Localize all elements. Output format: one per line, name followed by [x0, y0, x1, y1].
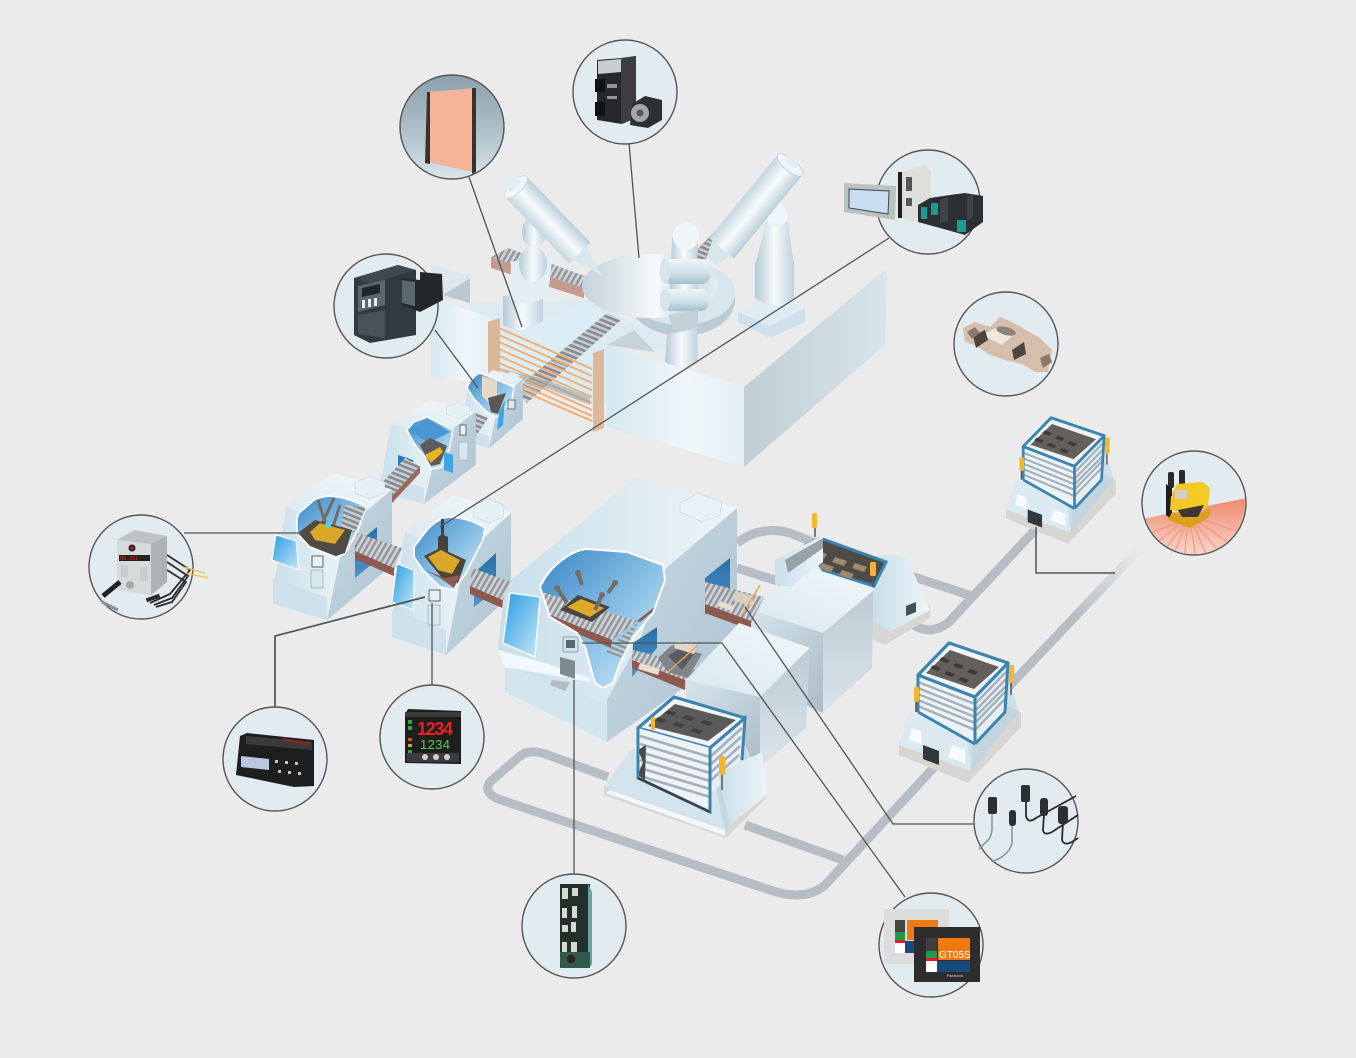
belt between machines 1 and 2	[456, 408, 488, 447]
belt between machines 2 and 3	[379, 458, 420, 503]
factory automation illustration	[88, 39, 1247, 998]
machine 3	[272, 473, 392, 620]
cell floor	[470, 300, 690, 405]
callout: laser marker controller: 88. 251	[120, 556, 138, 562]
workpiece	[424, 548, 466, 583]
rear panel	[884, 909, 949, 964]
callout: controller and display	[844, 150, 983, 254]
left robot	[498, 169, 613, 330]
machine 4	[392, 495, 511, 655]
middle AGV	[899, 643, 1021, 783]
conveyor exit lower	[632, 640, 702, 690]
belt between machines 4 and 5	[470, 568, 511, 610]
display	[429, 590, 440, 601]
keypad	[560, 657, 575, 679]
callout: servo motor and driver	[573, 40, 677, 144]
back AGV	[775, 513, 930, 645]
display	[312, 556, 323, 567]
front panel: GT05S	[939, 950, 971, 961]
workpiece	[298, 520, 352, 556]
sensor	[438, 519, 448, 553]
cutaway window	[540, 549, 665, 688]
callout: temperature controller: 1234	[420, 737, 450, 752]
belt between machines 3 and 4	[355, 533, 402, 576]
rear robot	[738, 203, 805, 338]
roof block	[680, 493, 722, 522]
laser beams	[318, 498, 340, 530]
right wall side	[744, 268, 887, 467]
callout: laser marker controller	[89, 515, 208, 619]
callout: safety laser scanner	[1142, 451, 1247, 558]
callout: light curtain	[400, 75, 504, 179]
machine 2	[381, 400, 476, 504]
callout: GT05S touch panels	[879, 893, 983, 997]
front panel	[914, 927, 980, 982]
rear conveyor section	[692, 220, 735, 262]
light blue transfer path	[500, 302, 607, 390]
inner wall shadow	[607, 330, 655, 352]
left wall	[431, 297, 491, 384]
lower AGV	[604, 697, 767, 838]
upper AGV	[1006, 418, 1116, 544]
enclosure with robot cell	[431, 149, 887, 467]
blue side panel	[272, 535, 299, 570]
callout: power supply	[334, 254, 443, 358]
callout: photoelectric sensors	[974, 769, 1078, 873]
window	[297, 496, 366, 558]
rotary table	[582, 254, 735, 336]
right opening	[355, 527, 377, 578]
conveyor exit upper	[705, 582, 764, 630]
right opening	[474, 553, 496, 607]
callout: temperature controller: 1234	[417, 719, 453, 739]
blue side panel	[392, 564, 414, 610]
callout: power meter	[223, 707, 327, 811]
right openings	[705, 558, 730, 615]
leader lines	[184, 143, 1115, 897]
callout: gripper	[954, 292, 1058, 396]
back wall	[431, 265, 470, 303]
callout: temperature controller	[380, 685, 484, 789]
AGV tracks	[488, 530, 1140, 895]
right robot	[660, 149, 807, 367]
machine 1	[461, 370, 523, 448]
big gray block	[751, 565, 874, 713]
back conveyor	[491, 248, 590, 298]
window	[414, 517, 485, 590]
callout: relay module	[522, 874, 626, 978]
display	[563, 637, 578, 652]
fixture with bolts	[554, 570, 618, 622]
machine 5 large	[498, 478, 737, 742]
right wall front	[607, 345, 744, 467]
main diagonal conveyor	[515, 313, 621, 403]
second gray block	[686, 623, 810, 767]
front panel: Panasonic	[947, 974, 964, 978]
safety light curtain	[488, 318, 604, 432]
blue panel	[503, 593, 540, 657]
